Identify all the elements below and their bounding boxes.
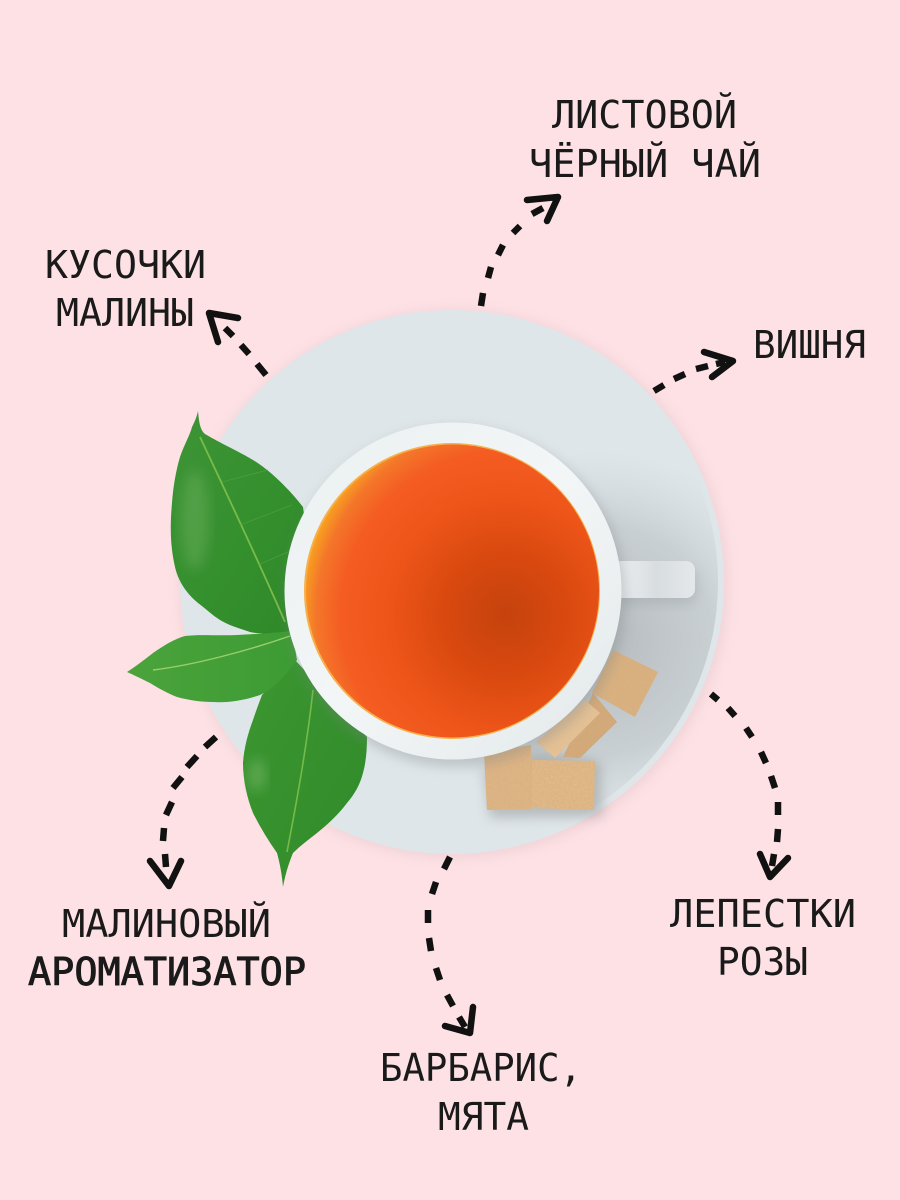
- label: малиновый ароматизатор: МАЛИНОВЫЙ: [62, 902, 271, 946]
- label: малиновый ароматизатор: АРОМАТИЗАТОР: [28, 950, 306, 994]
- label: кусочки малины: [45, 243, 206, 335]
- leaf: left: [127, 631, 297, 702]
- label: кусочки малины: КУСОЧКИ: [45, 243, 206, 287]
- label: барбарис, мята: МЯТА: [438, 1095, 529, 1139]
- cup handle: [610, 561, 696, 604]
- arrow: to вишня: [654, 352, 733, 391]
- leaf: bottom: [243, 660, 367, 887]
- leaf: top: [171, 411, 312, 634]
- label: лепестки розы: [670, 892, 856, 984]
- label: листовой чёрный чай: ЛИСТОВОЙ: [552, 93, 737, 137]
- tea leaves: [127, 411, 367, 887]
- label: лепестки розы: ЛЕПЕСТКИ: [670, 892, 856, 936]
- label: вишня: ВИШНЯ: [753, 323, 866, 367]
- cup: [284, 422, 626, 767]
- arrow: to листовой чёрный чай: [481, 197, 558, 306]
- label: листовой чёрный чай: ЧЁРНЫЙ ЧАЙ: [529, 142, 761, 186]
- saucer: [180, 310, 726, 856]
- label: барбарис, мята: [380, 1046, 582, 1139]
- arrow: to барбарис, мята: [428, 857, 473, 1033]
- sugar cubes: [484, 650, 658, 818]
- label: барбарис, мята: БАРБАРИС,: [380, 1046, 582, 1090]
- label: листовой чёрный чай: [529, 93, 761, 186]
- label: кусочки малины: МАЛИНЫ: [56, 291, 194, 335]
- arrow: to лепестки розы: [711, 694, 788, 877]
- arrow: to малиновый ароматизатор: [150, 737, 216, 886]
- label: лепестки розы: РОЗЫ: [717, 940, 808, 984]
- arrow: to кусочки малины: [209, 313, 266, 375]
- label: малиновый ароматизатор: [28, 902, 306, 994]
- illustration: tea cup on saucer: [127, 310, 790, 887]
- tea surface: [306, 444, 599, 738]
